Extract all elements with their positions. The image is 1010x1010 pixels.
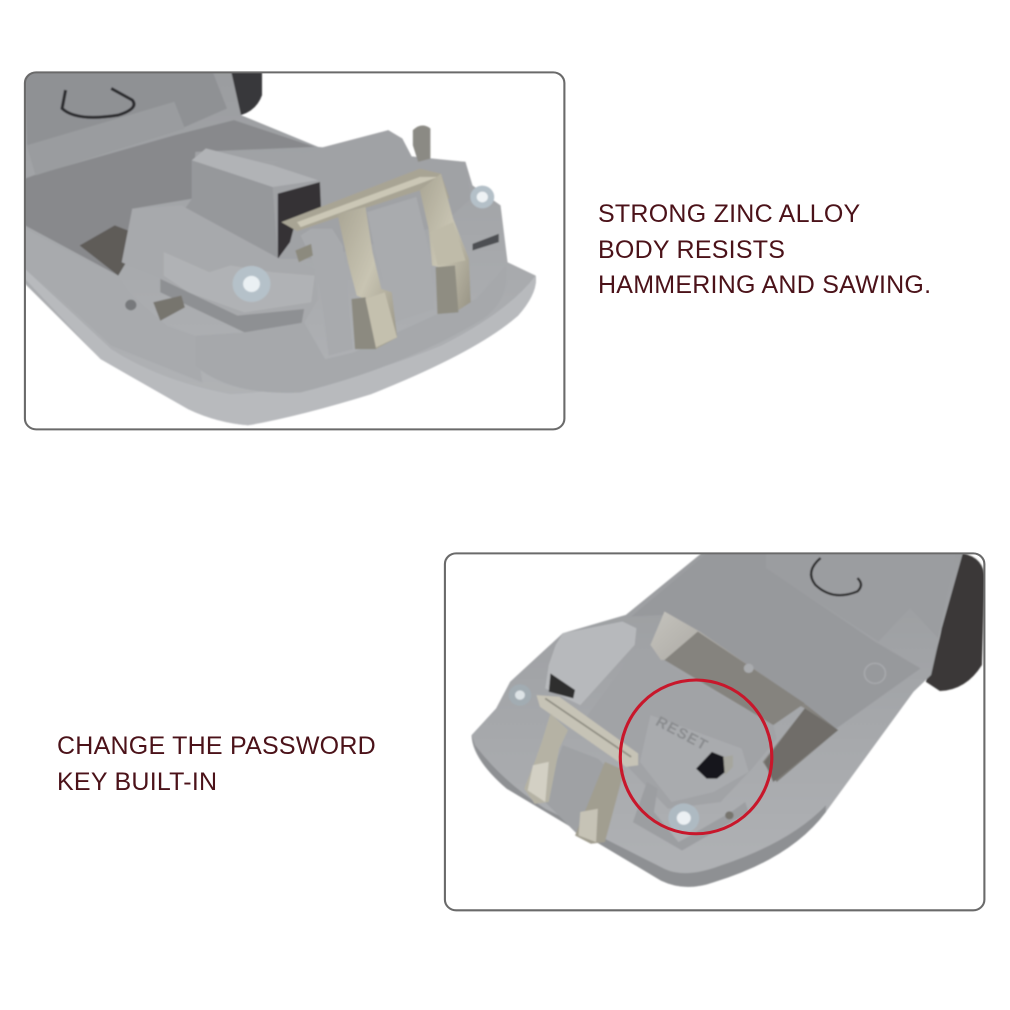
reset switch <box>696 752 729 779</box>
pins <box>153 296 185 321</box>
front bolt <box>668 803 699 833</box>
raised front shoulder <box>203 322 385 393</box>
key right prong <box>575 762 624 844</box>
text block: change password <box>57 732 376 796</box>
panel: reset key photo <box>444 552 986 912</box>
inner floor <box>25 120 315 276</box>
left rim wall <box>25 229 202 383</box>
red highlight circle <box>620 680 772 834</box>
center column <box>547 752 602 834</box>
black wire ring <box>62 88 134 117</box>
text block: zinc alloy <box>598 200 931 299</box>
key right prong <box>420 174 471 312</box>
text block: change password: CHANGE THE PASSWORD <box>57 732 376 760</box>
key left prong <box>337 207 397 349</box>
right side bolt <box>470 186 494 208</box>
text block: zinc alloy: BODY RESISTS <box>598 236 785 264</box>
lower plate <box>160 279 304 332</box>
housing block <box>323 130 412 158</box>
small top pin <box>413 126 430 162</box>
panel: zinc alloy body photo <box>24 71 566 430</box>
lock base plate <box>26 73 536 395</box>
text block: change password: KEY BUILT-IN <box>57 768 217 796</box>
flange lip <box>472 735 826 887</box>
recess <box>80 225 132 276</box>
panel border <box>445 553 984 910</box>
flange lip <box>26 270 536 398</box>
text block: zinc alloy: HAMMERING AND SAWING. <box>598 271 931 299</box>
front bolt <box>233 266 270 302</box>
lock base plate <box>472 553 963 887</box>
panel border <box>25 72 564 429</box>
key slot opening <box>278 182 322 259</box>
main floor <box>702 632 919 728</box>
black rear housing <box>926 553 985 691</box>
hinge panel <box>766 553 956 642</box>
front shoulder <box>633 782 749 850</box>
metal key top bar <box>536 695 638 767</box>
metal plate <box>650 612 838 782</box>
black wire ring <box>811 558 861 595</box>
key slot tower <box>545 622 636 705</box>
upper hinge panel <box>26 74 226 145</box>
lower stepped block <box>121 208 278 264</box>
metal key top bar <box>281 169 450 231</box>
reset housing block <box>652 783 736 808</box>
left bolt <box>510 685 530 705</box>
black rear housing <box>230 73 263 116</box>
RESET embossed lettering: RESET <box>653 713 711 754</box>
key left prong <box>524 713 568 804</box>
text block: zinc alloy: STRONG ZINC ALLOY <box>598 200 860 228</box>
center column <box>306 242 314 258</box>
